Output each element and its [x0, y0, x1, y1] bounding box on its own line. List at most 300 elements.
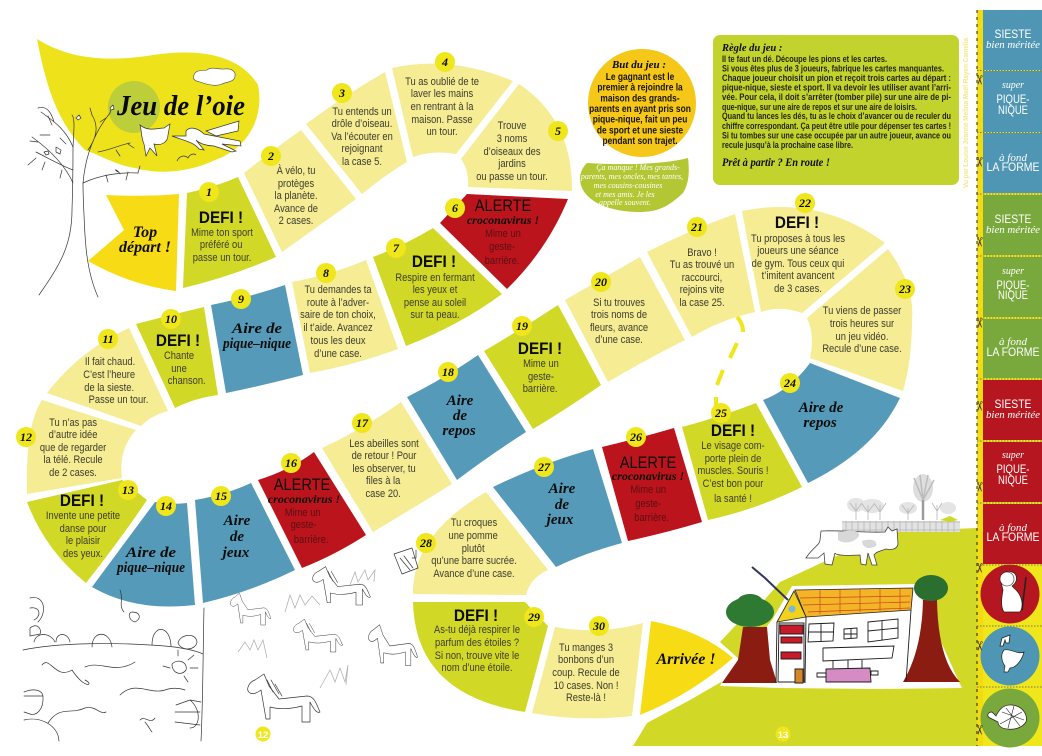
square 14 aire de pique-nique — [92, 496, 195, 607]
text: coup. Recule de — [552, 667, 620, 679]
square 25 défi — [682, 403, 802, 520]
blue picnic card — [983, 71, 1042, 132]
text: Mime ton sport — [191, 227, 253, 239]
text: la santé ! — [714, 493, 752, 505]
cutting line with scissors: ✂ — [971, 563, 986, 574]
text: de 2 cases. — [49, 467, 97, 479]
blue siesta card: bien méritée — [986, 40, 1040, 51]
text: geste- — [635, 498, 661, 510]
pawn: blue — [980, 626, 1040, 686]
cutting line with scissors: ✂ — [971, 725, 986, 736]
number 22 — [795, 193, 815, 213]
text: barrière. — [294, 534, 329, 546]
subtitle: croconavirus ! — [612, 469, 684, 483]
text: Bravo ! — [687, 247, 717, 259]
left tree — [722, 594, 777, 683]
text: les yeux et — [413, 284, 457, 296]
blue sport card — [983, 133, 1042, 193]
text: tous les deux — [311, 335, 365, 347]
square 12 — [16, 400, 136, 494]
text: pense au soleil — [404, 297, 466, 309]
text: geste- — [291, 519, 317, 531]
square 28 — [413, 492, 548, 595]
text: Tu n’as pas — [49, 417, 97, 429]
text: Tu entends un — [332, 106, 392, 118]
number 30: 30 — [592, 619, 605, 633]
goal text: Le gagnant est le — [606, 71, 674, 83]
text: 2 cases. — [279, 215, 313, 227]
square 20 — [565, 257, 685, 382]
number 11: 11 — [102, 332, 114, 346]
text: plutôt — [462, 543, 485, 555]
red picnic card — [983, 442, 1042, 502]
text: Trouve — [498, 120, 527, 132]
number 20: 20 — [594, 275, 607, 289]
text: route à l’adver- — [307, 297, 369, 309]
square 6 alerte — [440, 194, 568, 289]
page number 12 — [256, 726, 270, 742]
title défi: DEFI ! — [156, 331, 200, 350]
goal text: premier à rejoindre la — [597, 82, 683, 94]
subtitle: croconavirus ! — [268, 492, 340, 506]
label: Aire — [548, 481, 576, 497]
goal heading: But du jeu : — [611, 59, 666, 71]
speech bubble: mes cousins-cousines — [594, 181, 662, 190]
green siesta card: bien méritée — [986, 225, 1040, 236]
text: Mime un — [523, 358, 559, 370]
square 11 — [47, 328, 168, 426]
number 4: 4 — [441, 55, 448, 69]
speech bubble: Ça manque ! Mes grands- — [596, 163, 680, 172]
number 25: 25 — [714, 406, 727, 420]
text: raccourci, — [682, 272, 722, 284]
text: Respire en fermant — [395, 272, 475, 284]
text: que de regarder — [40, 442, 107, 454]
rules text: Si vous êtes plus de 3 joueurs, fabrique les cartes manquantes. — [722, 64, 944, 74]
blue picnic card: PIQUE- — [996, 92, 1030, 106]
red sport card — [983, 504, 1042, 564]
number 23: 23 — [898, 282, 911, 296]
red siesta card: bien méritée — [986, 410, 1040, 421]
cutting line with scissors: ✂ — [971, 482, 986, 493]
text: drôle d’oiseau. — [332, 118, 392, 130]
antenna — [752, 567, 788, 600]
far trees — [842, 474, 960, 532]
number 13: 13 — [122, 483, 134, 497]
green siesta card — [983, 195, 1042, 255]
rules text: Chaque joueur choisit un pion et reçoit trois cartes au départ : — [722, 73, 951, 83]
text: préféré ou — [200, 239, 242, 251]
square 3 — [306, 72, 407, 194]
title défi: DEFI ! — [711, 421, 755, 440]
text: Recule d’une case. — [822, 343, 902, 355]
number 10: 10 — [165, 312, 177, 326]
text: Reste-là ! — [566, 692, 606, 704]
text: chanson. — [168, 375, 206, 387]
red siesta card — [983, 380, 1042, 440]
cutting line with scissors: ✂ — [971, 641, 986, 652]
number 2: 2 — [267, 149, 274, 163]
number 15: 15 — [215, 489, 227, 503]
pawn: red — [980, 564, 1040, 624]
right tree — [903, 575, 960, 682]
text: Va l’écouter en — [331, 131, 393, 143]
goal text: de sport et une sieste — [597, 125, 683, 137]
square 5 — [461, 84, 572, 191]
label: jeux — [545, 512, 574, 528]
speech bubble — [580, 158, 689, 212]
square 21 — [647, 214, 755, 337]
green picnic card: PIQUE- — [996, 278, 1030, 292]
text: 10 cases. Non ! — [554, 680, 618, 692]
rules text: Il te faut un dé. Découpe les pions et les cartes. — [722, 54, 887, 64]
text: la planète. — [274, 190, 318, 202]
text: files à la — [366, 475, 401, 487]
title alerte: ALERTE — [274, 476, 330, 494]
speech bubble: parents, mes oncles, mes tantes, — [580, 172, 683, 181]
cutting line with scissors: ✂ — [971, 401, 986, 412]
rules closing line: Prêt à partir ? En route ! — [722, 155, 830, 169]
drawing: horse 2 — [313, 567, 370, 605]
title défi: DEFI ! — [518, 339, 562, 358]
drawing: scribbles — [238, 570, 375, 688]
text: barrière. — [634, 512, 669, 524]
title défi: DEFI ! — [775, 213, 819, 232]
label: pique–nique — [115, 560, 185, 576]
text: sur ta peau. — [410, 309, 460, 321]
rules text: chiffre correspondant. Ça peut être utile pour dépenser tes cartes ! — [722, 121, 951, 131]
number 29: 29 — [527, 610, 540, 624]
dashed shortcut arrow from 21 to 25 — [716, 317, 743, 407]
rules text: pique-nique, sieste et sport. Il va devoir les utiliser avant l’arri- — [722, 82, 951, 92]
title alerte: ALERTE — [475, 197, 531, 215]
cards strip — [977, 10, 1042, 748]
square 19 défi — [484, 305, 601, 429]
text: Mime un — [285, 507, 321, 519]
drawing: small notebook near square 28 — [394, 548, 418, 574]
red picnic card: NIQUE — [998, 473, 1028, 487]
square 26 alerte — [602, 427, 702, 541]
speech bubble: appelle souvent. — [599, 198, 651, 207]
label: Aire — [446, 393, 474, 409]
bottom page number 13: 13 — [778, 730, 788, 741]
cloud — [193, 68, 235, 85]
label — [221, 321, 291, 352]
number 3: 3 — [338, 86, 345, 100]
square 23 — [807, 249, 915, 391]
number 7: 7 — [393, 241, 400, 255]
square 17 — [322, 402, 452, 532]
number 19: 19 — [516, 319, 528, 333]
rules panel — [713, 35, 959, 185]
text: d’une case. — [595, 334, 643, 346]
text: Si tu trouves — [593, 297, 645, 309]
label: repos — [803, 415, 837, 431]
cutting line with scissors: ✂ — [971, 75, 986, 86]
text: une — [171, 363, 187, 375]
text: nom d’une étoile. — [441, 662, 513, 674]
rules text: recule jusqu’à la prochaine case libre. — [722, 140, 853, 150]
text: Chante — [164, 350, 194, 362]
text: 3 noms — [497, 133, 527, 145]
text: Les abeilles sont — [349, 438, 419, 450]
label: jeux — [221, 545, 250, 561]
blue picnic card: super — [1002, 80, 1025, 91]
text: Tu croques — [451, 517, 497, 529]
label: de — [555, 497, 569, 513]
square 1 défi — [183, 177, 276, 288]
green siesta card: SIESTE — [994, 212, 1032, 226]
subtitle: croconavirus ! — [467, 213, 539, 227]
label: Aire — [223, 513, 251, 529]
text: qu’une barre sucrée. — [431, 555, 517, 567]
flying girl and cat — [140, 121, 241, 161]
number 21: 21 — [690, 220, 703, 234]
goal text: parents en ayant pris son — [589, 103, 691, 115]
text: geste- — [528, 371, 554, 383]
blue picnic card: NIQUE — [998, 103, 1028, 117]
text: d’autre idée — [49, 429, 98, 441]
green sport card: à fond — [999, 336, 1027, 348]
text: la télé. Recule — [43, 454, 103, 466]
square 2 — [244, 130, 356, 252]
text: Avance d’une case. — [433, 568, 515, 580]
rules text: Quand tu lances les dés, tu as le choix d’avancer ou de reculer du — [722, 111, 951, 121]
roof — [777, 588, 913, 622]
drawing: field scene — [23, 590, 204, 741]
square 15 aire de jeux — [195, 483, 295, 603]
walls and windows — [776, 610, 911, 683]
square 18 aire de repos — [407, 355, 526, 480]
number 28: 28 — [419, 536, 432, 550]
tree — [28, 105, 140, 297]
main title: Jeu de l’oie — [116, 91, 245, 122]
number 26: 26 — [629, 430, 642, 444]
text: il t’aide. Avancez — [303, 322, 373, 334]
label — [115, 545, 185, 576]
label: repos — [442, 423, 476, 439]
text: Mime un — [485, 228, 521, 240]
text: As-tu déjà respirer le — [434, 624, 520, 636]
text: une pomme — [449, 530, 498, 542]
green sport card — [983, 319, 1042, 378]
square 16 alerte — [258, 452, 366, 568]
text: geste- — [489, 241, 515, 253]
number 12: 12 — [20, 430, 32, 444]
blue siesta card: SIESTE — [994, 27, 1032, 41]
text: les observer, tu — [352, 463, 416, 475]
text: la case 25. — [679, 297, 725, 309]
label: Aire de — [125, 545, 176, 561]
goal text: pendant son trajet. — [602, 135, 678, 147]
text: bonbons d’un — [558, 654, 614, 666]
text: de gym. Tous ceux qui — [752, 258, 844, 270]
drawing: horse 4 — [368, 625, 418, 666]
drawing: big horse — [248, 674, 320, 722]
text: Le visage com- — [701, 440, 765, 452]
text: Mime un — [630, 484, 666, 496]
number 27: 27 — [537, 460, 551, 474]
title alerte: ALERTE — [620, 454, 676, 472]
square 27 aire de jeux — [493, 449, 622, 567]
number 8: 8 — [323, 266, 329, 280]
goal text: maison des grands- — [600, 93, 680, 105]
text: muscles. Souris ! — [697, 465, 769, 477]
text: porte plein de — [705, 453, 762, 465]
square 9 aire de pique-nique — [211, 285, 303, 393]
number 22: 22 — [798, 196, 811, 210]
text: de la sieste. — [84, 382, 134, 394]
square 29 défi — [413, 602, 548, 712]
text: ou passe un tour. — [476, 171, 548, 183]
label: de — [230, 529, 244, 545]
speech bubble: et mes amis. Je les — [595, 190, 655, 199]
text: rejoins vite — [680, 284, 725, 296]
arrivée: Arrivée ! — [655, 651, 716, 668]
top départ: départ ! — [119, 239, 171, 256]
blue siesta card — [983, 10, 1042, 70]
text: Tu viens de passer — [823, 305, 902, 317]
text: la case 5. — [342, 156, 382, 168]
credit line: Vu par Louise Jeanne Melina Maël Rayen Camelia — [961, 37, 970, 188]
red picnic card: PIQUE- — [996, 462, 1030, 476]
rules text: Si tu tombes sur une case occupée par un autre joueur, avance ou — [722, 130, 951, 140]
number 5: 5 — [555, 124, 561, 138]
text: des yeux. — [63, 548, 103, 560]
text: Avance de — [274, 203, 318, 215]
red siesta card: SIESTE — [994, 397, 1032, 411]
text: saire de ton choix, — [300, 309, 376, 321]
drawing: horse 5 — [230, 593, 271, 625]
text: maison. Passe — [411, 114, 473, 126]
rules text — [722, 54, 951, 150]
title défi: DEFI ! — [60, 491, 104, 510]
top départ — [88, 194, 179, 291]
number 14: 14 — [160, 499, 172, 513]
text: Tu as trouvé un — [670, 259, 734, 271]
green picnic card: super — [1002, 266, 1025, 277]
number 17: 17 — [356, 416, 369, 430]
text: rejoignant — [342, 143, 383, 155]
cow — [806, 527, 898, 565]
number 9: 9 — [238, 292, 244, 306]
text: de retour ! Pour — [352, 450, 417, 462]
bottom page number 13 — [776, 726, 790, 742]
green hill with house — [633, 474, 977, 746]
cutting line with scissors: ✂ — [971, 237, 986, 248]
green picnic card — [983, 257, 1042, 317]
title défi: DEFI ! — [412, 252, 456, 271]
square 10 défi — [136, 307, 218, 408]
house — [720, 567, 962, 689]
title défi: DEFI ! — [454, 606, 498, 625]
rules text: que-nique, sur une aire de repos et sur une aire de loisirs. — [722, 102, 917, 112]
green picnic card: NIQUE — [998, 288, 1028, 302]
text: en rentrant à la — [411, 101, 474, 113]
label: Aire de — [231, 321, 282, 337]
top départ: Top — [133, 224, 157, 241]
square 7 défi — [373, 228, 502, 346]
text: barrière. — [485, 255, 519, 267]
text: d’une case. — [314, 348, 362, 360]
cutting line with scissors: ✂ — [971, 318, 986, 329]
text: trois heures sur — [830, 318, 895, 330]
text: t’imitent avancent — [762, 270, 834, 282]
red sport card: à fond — [999, 522, 1027, 534]
rules text: vée. Pour cela, il doit s’arrêter (tomber pile) sur une aire de pi- — [722, 92, 951, 102]
text: parfum des étoiles ? — [435, 637, 519, 649]
title blob — [37, 39, 259, 172]
green circle behind title — [108, 81, 160, 133]
goal circle — [588, 49, 696, 157]
text: un tour. — [426, 126, 458, 138]
square 22 défi — [742, 193, 885, 313]
label: de — [453, 408, 467, 424]
text: de 3 cases. — [774, 283, 822, 295]
text: Tu demandes ta — [304, 284, 372, 296]
cutting line with scissors: ✂ — [971, 157, 986, 168]
text: d’oiseaux des — [483, 146, 541, 158]
text: C’est l’heure — [83, 369, 135, 381]
square 30 — [532, 616, 643, 718]
label: Aire de — [798, 400, 844, 416]
number 6: 6 — [452, 201, 458, 215]
number 1: 1 — [206, 185, 212, 199]
text: Tu as oublié de te — [405, 76, 479, 88]
goal text: pique-nique, fait un peu — [593, 114, 688, 126]
blue sport card: à fond — [999, 152, 1027, 164]
text: À vélo, tu — [277, 163, 315, 177]
text: C’est bon pour — [703, 478, 764, 490]
arrivée — [640, 621, 733, 715]
rules heading: Règle du jeu : — [721, 43, 782, 54]
text: Invente une petite — [46, 510, 120, 522]
label: pique–nique — [221, 336, 291, 352]
text: fleurs, avance — [590, 322, 648, 334]
number 25 — [711, 403, 731, 423]
square 24 aire de repos — [763, 363, 900, 483]
text: jardins — [497, 158, 526, 170]
number 16: 16 — [285, 456, 297, 470]
cutting line with scissors — [971, 10, 1042, 746]
text: Tu proposes à tous les — [751, 233, 845, 245]
text: Passe un tour. — [89, 394, 148, 406]
text: barrière. — [523, 383, 557, 395]
text: Tu manges 3 — [559, 642, 613, 654]
title défi: DEFI ! — [199, 208, 243, 227]
pawn: green — [980, 688, 1040, 748]
text: trois noms de — [591, 309, 647, 321]
square 8 — [292, 260, 398, 373]
text: un jeu vidéo. — [836, 331, 888, 343]
page number 12: 12 — [258, 730, 268, 741]
text: joueurs une séance — [756, 245, 839, 257]
text: Il fait chaud. — [85, 356, 135, 368]
red picnic card: super — [1002, 450, 1025, 461]
text: danse pour — [60, 523, 107, 535]
number 18: 18 — [442, 365, 454, 379]
square 4 — [392, 52, 513, 157]
text: Si non, trouve vite le — [435, 650, 520, 662]
text: le plaisir — [66, 535, 101, 547]
number 23 — [895, 279, 915, 299]
text: case 20. — [366, 488, 401, 500]
drawing: horse 3 — [293, 619, 343, 652]
number 24: 24 — [783, 376, 796, 390]
text: laver les mains — [411, 88, 473, 100]
text: passe un tour. — [193, 252, 251, 264]
square 13 défi — [27, 480, 147, 583]
